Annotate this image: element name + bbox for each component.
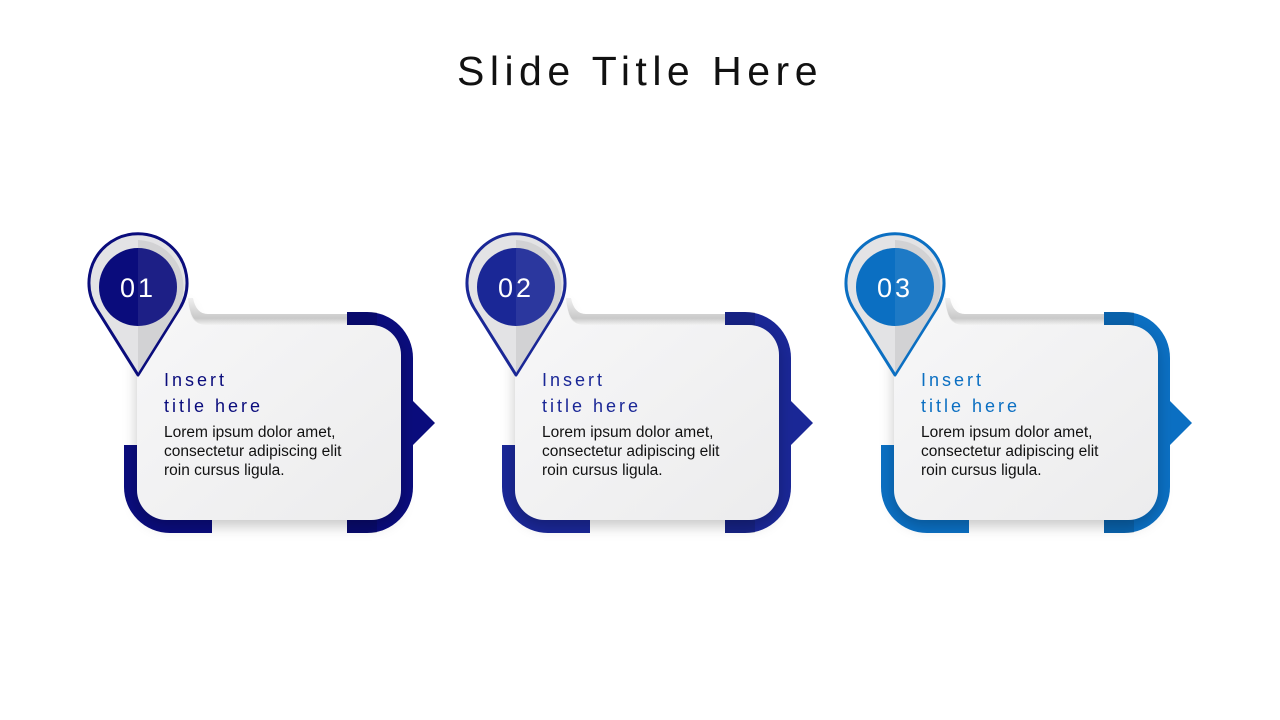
panel title 01: title here [164,396,263,416]
number 03: 03 [877,273,913,303]
panel: 01 [89,234,435,533]
panel text 03: roin cursus ligula. [921,462,1042,479]
panel text 02: consectetur adipiscing elit [542,443,720,460]
panel title 02: Insert [542,370,605,390]
panel title 03: title here [921,396,1020,416]
panel title 03: Insert [921,370,984,390]
panel text 03: Lorem ipsum dolor amet, [921,424,1092,441]
panel text 01: roin cursus ligula. [164,462,285,479]
panel text 02: roin cursus ligula. [542,462,663,479]
panel text 01: Lorem ipsum dolor amet, [164,424,335,441]
panel: 03 [846,234,1192,533]
panel title 02: title here [542,396,641,416]
title: Slide Title Here [457,48,823,94]
panel text 03: consectetur adipiscing elit [921,443,1099,460]
panel text 02: Lorem ipsum dolor amet, [542,424,713,441]
panel: 02 [467,234,813,533]
number 01: 01 [120,273,156,303]
panel title 01: Insert [164,370,227,390]
number 02: 02 [498,273,534,303]
panel text 01: consectetur adipiscing elit [164,443,342,460]
